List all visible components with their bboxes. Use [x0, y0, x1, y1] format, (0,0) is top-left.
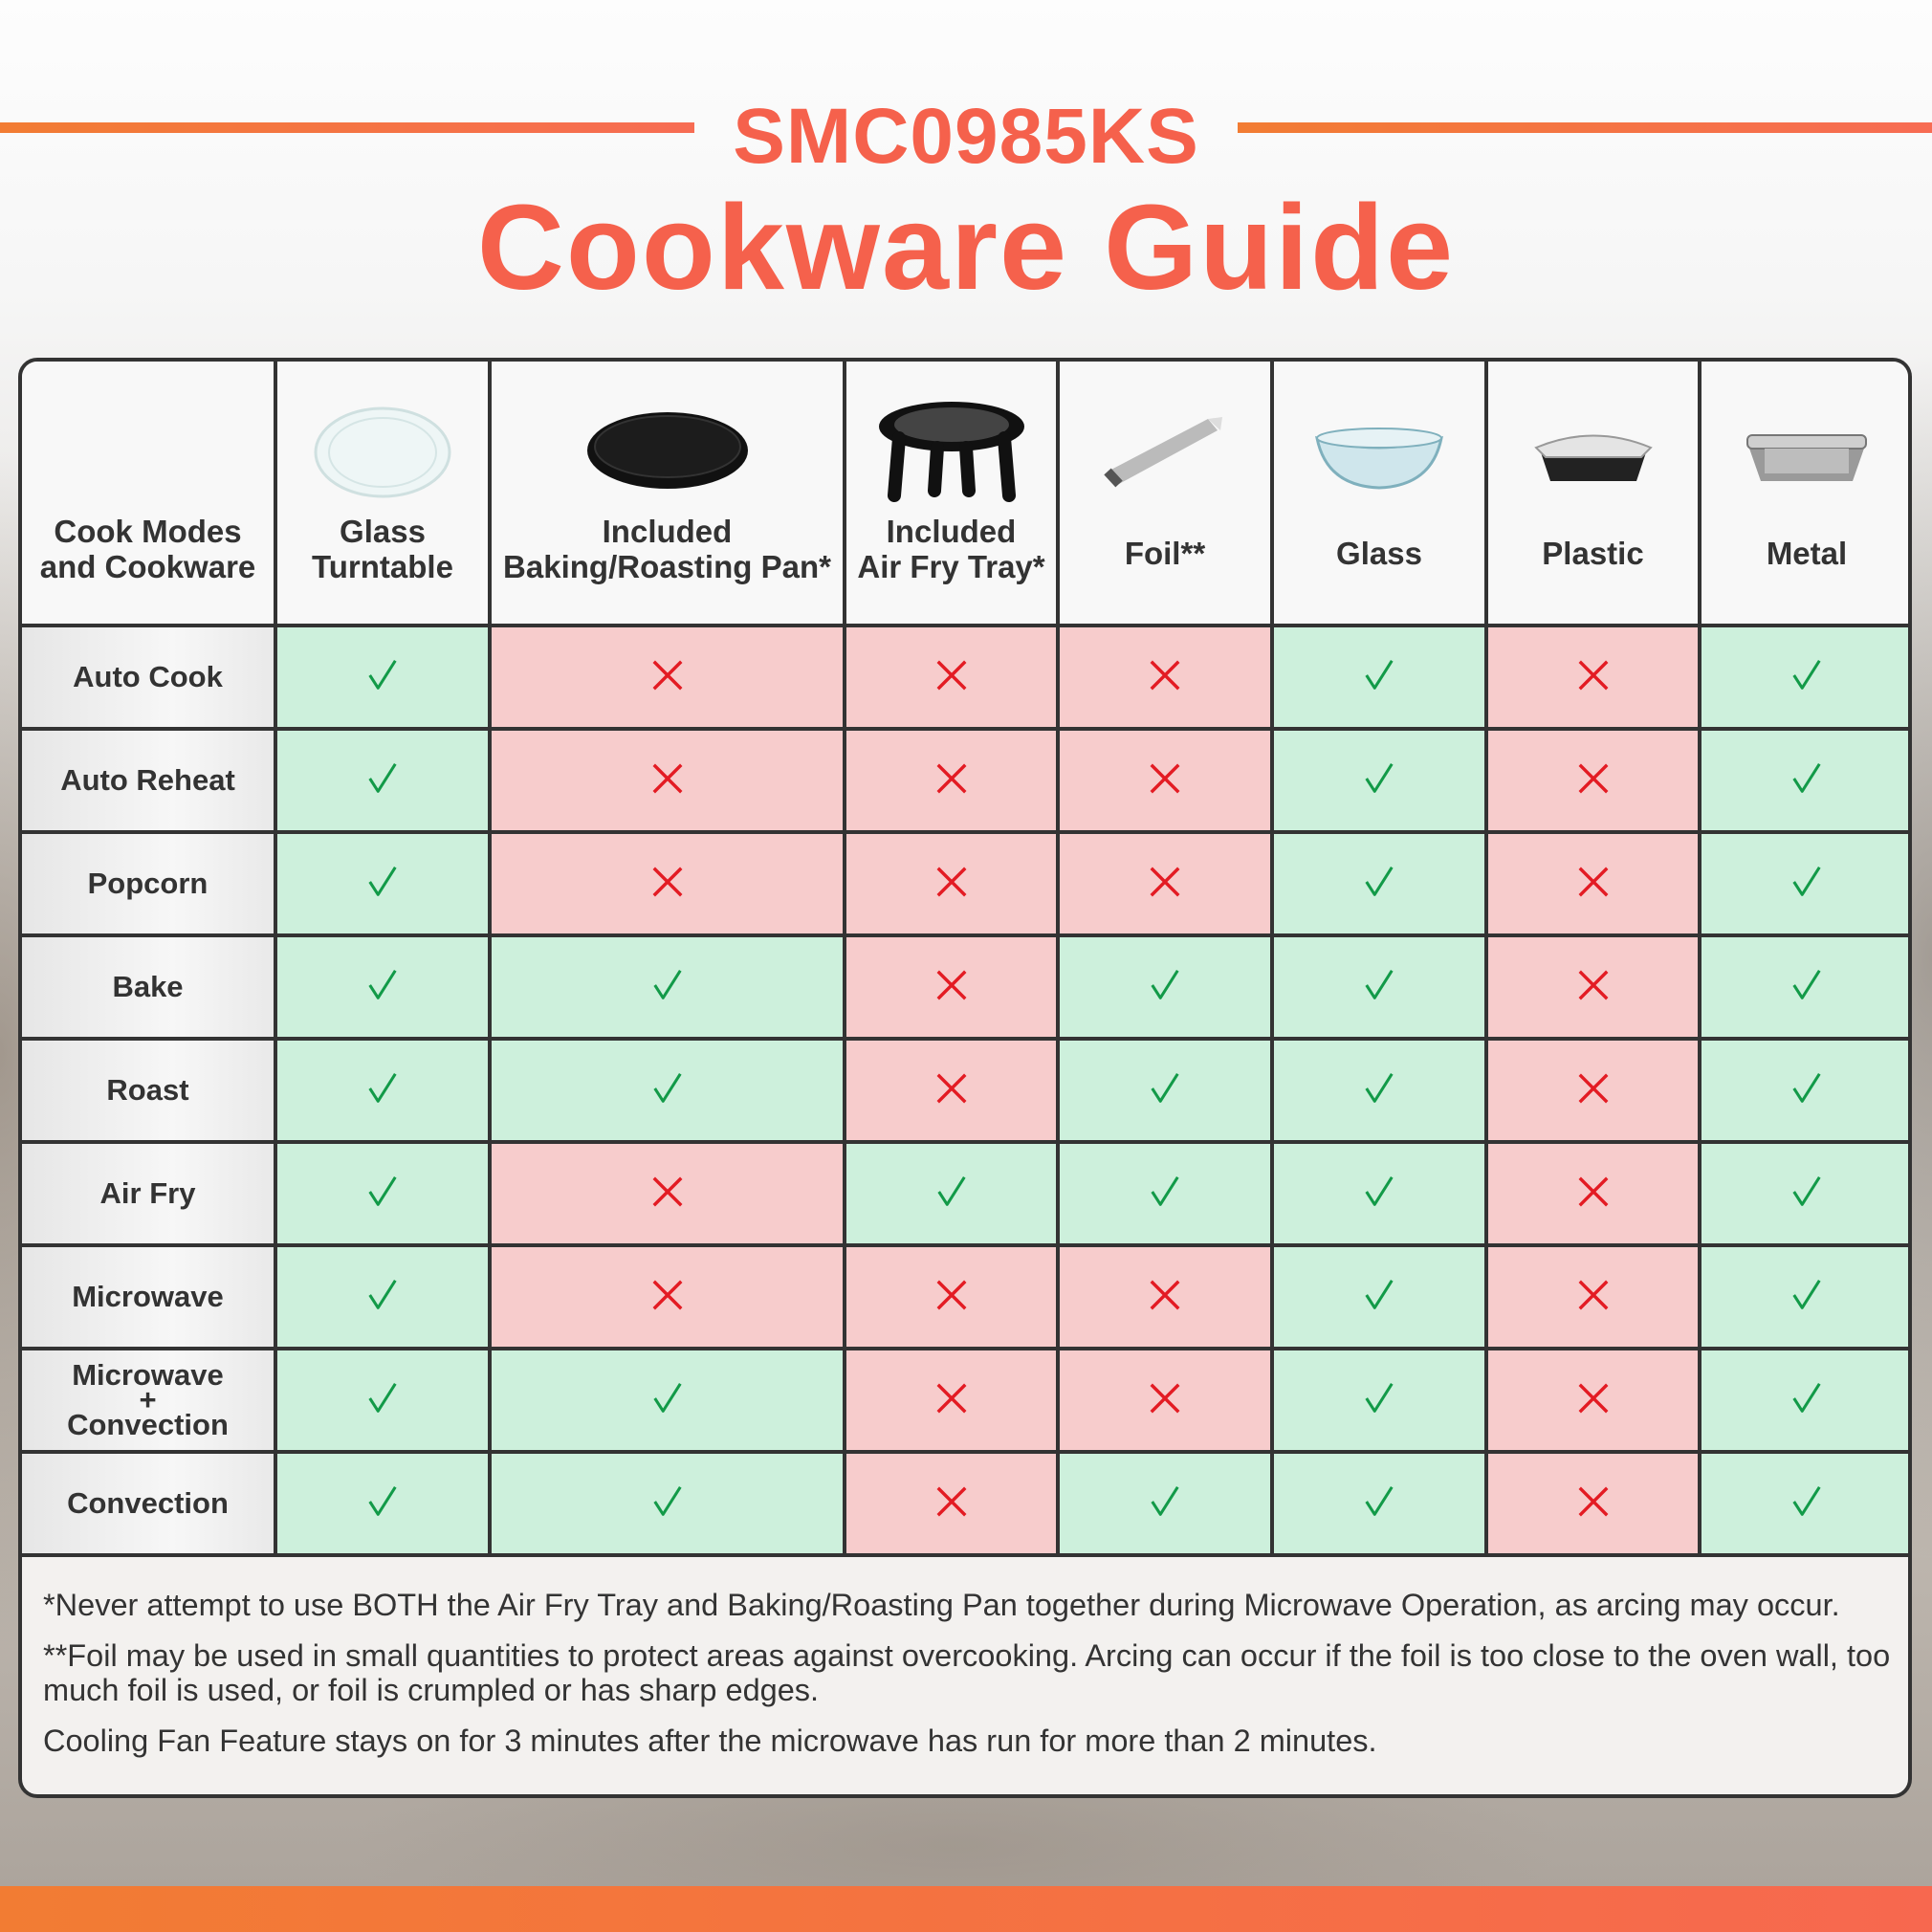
header row: Included [603, 514, 732, 549]
header row: Glass [340, 514, 426, 549]
header row: Included [887, 514, 1016, 549]
header row [22, 362, 1908, 1553]
header row: Plastic [1542, 536, 1644, 570]
row: Auto Cook: Auto Cook [73, 660, 223, 693]
row: Microwave: Microwave [72, 1280, 224, 1313]
row: Convection [22, 1454, 1908, 1553]
row: Microwave + Convection [22, 1350, 1908, 1450]
row: Popcorn: Popcorn [88, 867, 208, 900]
header row: Baking/Roasting Pan* [503, 549, 831, 584]
decorative title line left [0, 122, 694, 133]
footnotes: Cooling Fan Feature stays on for 3 minutes after the microwave has run for more than 2 minutes. [43, 1723, 1377, 1758]
decorative title line right [1238, 122, 1932, 133]
panel: compatibility table [18, 358, 1912, 1798]
header row: and Cookware [40, 549, 255, 584]
footnotes [43, 1588, 1890, 1758]
row: Auto Reheat [22, 731, 1908, 830]
header row: Cook Modes [54, 514, 242, 549]
row: Microwave + Convection: Convection [67, 1408, 229, 1441]
row: Roast [22, 1041, 1908, 1140]
bottom orange bar [0, 1886, 1932, 1932]
row: Microwave + Convection: Microwave [72, 1358, 224, 1392]
header row: Metal [1767, 536, 1847, 570]
row: Microwave + Convection: + [139, 1383, 157, 1416]
row: Microwave [22, 1247, 1908, 1347]
header row: Foil** [1125, 536, 1205, 570]
title: model: SMC0985KS [733, 93, 1199, 180]
header row: Air Fry Tray* [857, 549, 1045, 584]
header row: Turntable [312, 549, 453, 584]
row: Air Fry [22, 1144, 1908, 1243]
row: Bake: Bake [112, 970, 184, 1003]
row: Convection: Convection [67, 1486, 229, 1520]
header row: Glass [1336, 536, 1422, 570]
row: Bake [22, 937, 1908, 1037]
row: Air Fry: Air Fry [100, 1176, 195, 1210]
title: cookware guide: Cookware Guide [477, 180, 1455, 315]
row: Roast: Roast [106, 1073, 189, 1107]
row: Auto Cook [22, 627, 1908, 727]
row: Auto Reheat: Auto Reheat [60, 763, 235, 797]
row: Popcorn [22, 834, 1908, 933]
footnotes: **Foil may be used in small quantities to protect areas against overcooking. Arcing can occur if the foil is too close to the oven wall, too much foil is used, or foil is crumpled or has sharp edges. [43, 1638, 1890, 1707]
footnotes: *Never attempt to use BOTH the Air Fry Tray and Baking/Roasting Pan together during Microwave Operation, as arcing may occur. [43, 1588, 1840, 1622]
